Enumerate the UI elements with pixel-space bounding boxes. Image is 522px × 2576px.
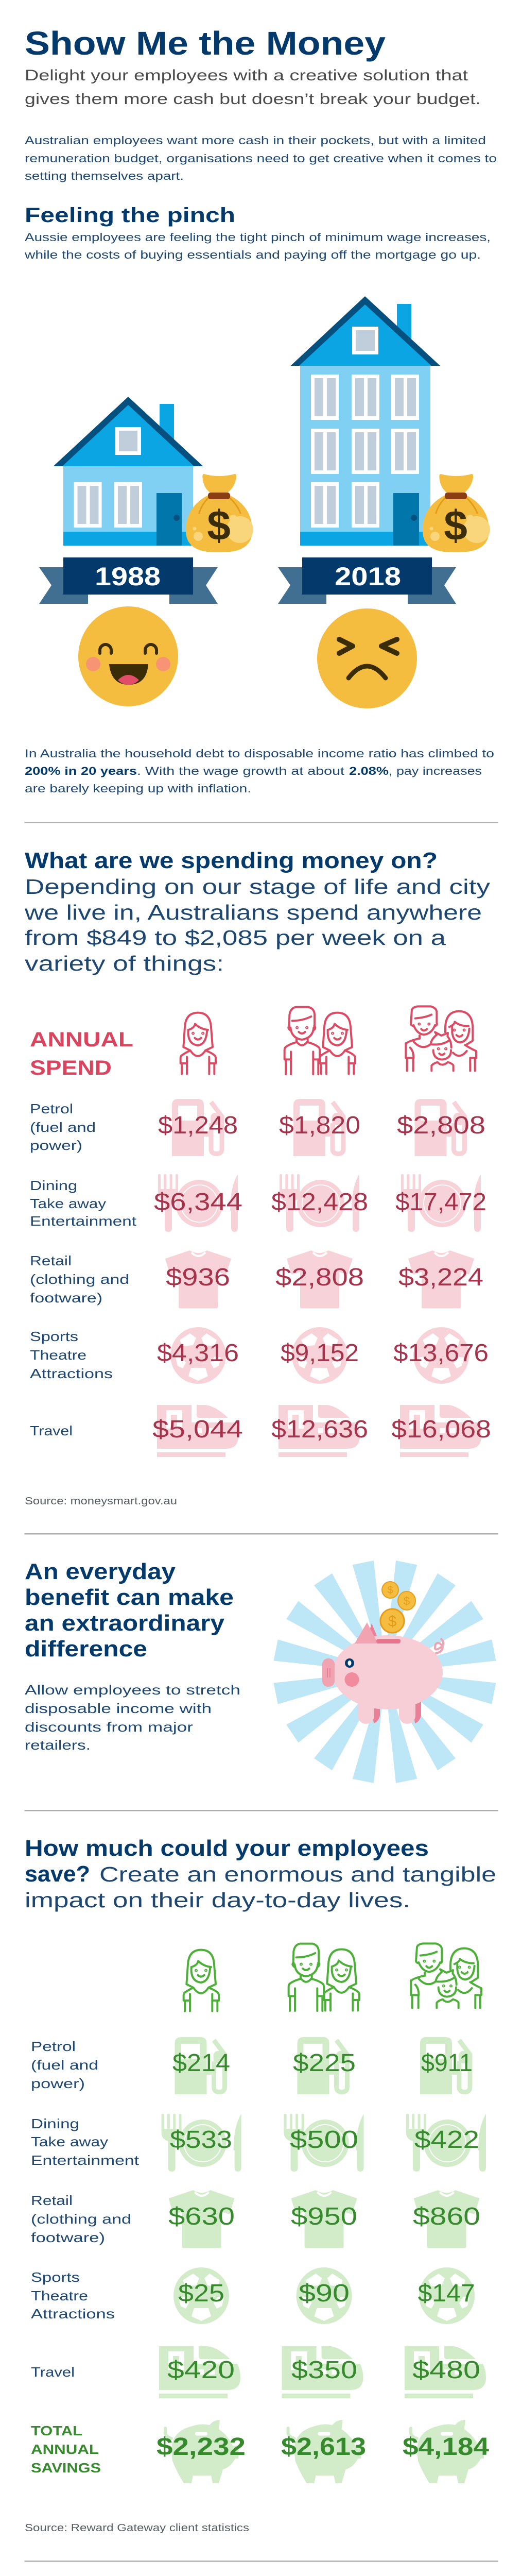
row: petrol — [31, 2037, 473, 2094]
text block: household debt: 200% in 20 years — [25, 765, 137, 777]
text block: variety of things: — [25, 952, 224, 975]
row: sports: Theatre — [31, 2288, 88, 2303]
row: dining: $17,472 — [395, 1189, 486, 1216]
heading — [25, 1836, 496, 1912]
heading: annual spend — [30, 1028, 133, 1079]
panel: everyday benefit — [25, 1559, 496, 1783]
row: total annual savings: $2,613 — [281, 2433, 366, 2461]
heading: impact on their day-to-day lives. — [25, 1888, 410, 1912]
icon: single person — [181, 1013, 216, 1074]
panel: how much could employees save — [25, 1836, 496, 2483]
icon: money bag 1988 — [186, 474, 253, 552]
row: travel: $420 — [167, 2357, 235, 2384]
row: sports: $147 — [418, 2280, 475, 2307]
icon: upset emoji — [317, 608, 417, 708]
row: sports: Theatre — [30, 1347, 86, 1363]
heading: Create an enormous and tangible — [99, 1862, 496, 1886]
text block: household debt: . With the wage growth at about — [137, 765, 345, 777]
header — [25, 25, 497, 182]
ribbon 2018: 2018 — [335, 562, 401, 591]
icon: couple — [285, 1007, 355, 1074]
heading: annual spend: ANNUAL — [30, 1028, 133, 1051]
row: petrol: $2,808 — [397, 1112, 485, 1139]
illustration: piggy bank: $ — [388, 1613, 397, 1630]
heading: an extraordinary — [25, 1611, 225, 1636]
row: sports: Attractions — [31, 2306, 115, 2321]
heading: An everyday — [25, 1559, 176, 1584]
row: dining: Dining — [30, 1178, 77, 1193]
intro paragraph — [25, 134, 497, 182]
row: petrol: $911 — [421, 2049, 473, 2077]
text block: household debt: In Australia the household debt to disposable income ratio has climbed to — [25, 747, 494, 760]
icon: family — [411, 1943, 481, 2008]
text block: household debt: , pay increases — [389, 765, 482, 777]
row: petrol: (fuel and — [30, 1120, 96, 1135]
row: petrol: $214 — [172, 2049, 230, 2077]
row: sports: Sports — [30, 1329, 78, 1344]
heading: Feeling the pinch — [25, 204, 235, 227]
row: travel: $480 — [412, 2357, 480, 2384]
row: sports: $25 — [178, 2280, 224, 2307]
text block: Depending on our stage of life and city — [25, 875, 491, 899]
icon: couple — [289, 1944, 359, 2011]
heading: difference — [25, 1636, 147, 1662]
text block: from $849 to $2,085 per week on a — [25, 926, 446, 950]
row: retail: $950 — [291, 2203, 357, 2230]
ribbon 1988 — [39, 557, 218, 604]
row: retail: $936 — [166, 1264, 230, 1291]
panel: feeling the pinch — [24, 204, 491, 261]
row: retail: footware) — [31, 2230, 105, 2245]
row: sports: Sports — [31, 2269, 80, 2285]
heading: How much could your employees — [25, 1836, 429, 1861]
row: dining: $12,428 — [271, 1189, 368, 1216]
source: moneysmart: Source: moneysmart.gov.au — [25, 1496, 177, 1507]
intro paragraph: setting themselves apart. — [25, 170, 184, 182]
row: sports: $9,152 — [281, 1340, 359, 1367]
text block: household debt: are barely keeping up with inflation. — [25, 782, 251, 795]
row: petrol: $1,248 — [158, 1112, 238, 1139]
row: travel: $12,636 — [271, 1416, 368, 1443]
row: dining — [31, 2114, 486, 2172]
row: dining: Take away — [31, 2134, 108, 2149]
heading: save? — [25, 1861, 90, 1887]
row: dining: $533 — [170, 2126, 232, 2154]
text block: we live in, Australians spend anywhere — [24, 901, 482, 924]
text block — [24, 875, 491, 975]
row: dining: $6,344 — [154, 1189, 242, 1216]
row: travel: Travel — [31, 2364, 75, 2380]
row: petrol: $225 — [293, 2049, 356, 2077]
source: reward gateway: Source: Reward Gateway client statistics — [25, 2522, 249, 2534]
icon: money bag 2018 — [423, 474, 490, 552]
row: sports: $4,316 — [157, 1340, 239, 1367]
title: Show Me the Money — [25, 25, 386, 62]
subtitle: Delight your employees with a creative solution that — [25, 67, 468, 84]
row: retail: (clothing and — [30, 1272, 129, 1287]
heading — [25, 1559, 234, 1662]
heading: benefit can make — [25, 1585, 234, 1610]
icon: single person — [184, 1950, 219, 2011]
row: dining: Entertainment — [31, 2153, 140, 2168]
row: total annual savings: SAVINGS — [31, 2460, 101, 2476]
row: total annual savings — [31, 2420, 489, 2483]
intro paragraph: Australian employees want more cash in their pockets, but with a limited — [25, 134, 486, 147]
row: sports: Attractions — [30, 1366, 113, 1381]
illustration: 2018 apartment — [290, 296, 440, 546]
row: petrol: power) — [30, 1138, 82, 1153]
text block: disposable income with — [25, 1701, 212, 1716]
row: dining: $500 — [290, 2126, 358, 2154]
row: sports: $13,676 — [393, 1340, 489, 1367]
row: retail: Retail — [30, 1253, 72, 1268]
row: dining: Dining — [31, 2116, 79, 2131]
row: travel — [31, 2346, 486, 2398]
row: sports — [30, 1327, 489, 1384]
row: travel — [30, 1405, 491, 1457]
row: total annual savings: $4,184 — [403, 2433, 489, 2461]
icon: family — [406, 1006, 476, 1071]
row: dining — [30, 1174, 486, 1232]
panel: what are we spending money on — [24, 848, 491, 975]
row: total annual savings: TOTAL — [31, 2423, 82, 2438]
illustration: 1988 house — [54, 397, 203, 546]
row: retail: $2,808 — [275, 1264, 364, 1291]
row: retail: footware) — [30, 1290, 102, 1306]
icon: happy emoji — [78, 606, 178, 706]
text block: Aussie employees are feeling the tight pinch of minimum wage increases, — [25, 231, 491, 244]
text block — [24, 231, 491, 261]
row: sports — [31, 2267, 475, 2324]
row: retail: (clothing and — [31, 2211, 131, 2227]
row: travel: Travel — [30, 1423, 73, 1438]
row: retail: $860 — [413, 2203, 480, 2230]
row: retail: $630 — [168, 2203, 235, 2230]
row: retail: $3,224 — [398, 1264, 483, 1291]
text block: retailers. — [25, 1737, 91, 1753]
text block: household debt: 2.08% — [349, 765, 389, 777]
intro paragraph: remuneration budget, organisations need to get creative when it comes to — [25, 152, 497, 165]
illustration: piggy bank — [274, 1561, 496, 1783]
row: travel: $16,068 — [391, 1416, 491, 1443]
row: total annual savings: $2,232 — [156, 2433, 246, 2461]
heading: What are we spending money on? — [25, 848, 438, 873]
row: travel: $5,044 — [152, 1416, 243, 1443]
row: petrol — [30, 1099, 485, 1156]
ribbon 1988: 1988 — [95, 562, 161, 591]
text block: discounts from major — [25, 1719, 193, 1735]
heading: annual spend: SPEND — [30, 1057, 112, 1079]
icon: money bag 2018: $ — [444, 502, 467, 549]
row: dining: Entertainment — [30, 1213, 137, 1229]
row: petrol: Petrol — [30, 1101, 73, 1116]
row: petrol: (fuel and — [31, 2057, 98, 2073]
row: petrol: $1,820 — [279, 1112, 360, 1139]
text block: while the costs of buying essentials and paying off the mortgage go up. — [24, 248, 481, 261]
ribbon 2018 — [278, 557, 456, 604]
text block: Allow employees to stretch — [25, 1682, 240, 1698]
subtitle: gives them more cash but doesn’t break your budget. — [25, 91, 481, 108]
row: petrol: Petrol — [31, 2039, 76, 2054]
row: dining: $422 — [414, 2126, 479, 2154]
icon: money bag 1988: $ — [207, 502, 231, 549]
row: retail — [31, 2190, 480, 2248]
row: retail — [30, 1250, 483, 1309]
row: retail: Retail — [31, 2193, 73, 2208]
row: sports: $90 — [299, 2280, 350, 2307]
subtitle — [25, 67, 481, 108]
row: total annual savings: ANNUAL — [31, 2442, 99, 2457]
text block — [25, 1682, 240, 1753]
row: petrol: power) — [31, 2076, 85, 2091]
row: travel: $350 — [291, 2357, 357, 2384]
text block: household debt — [25, 747, 494, 795]
panel: annual spend table — [30, 1006, 491, 1457]
illustration: piggy bank: $ — [387, 1585, 393, 1596]
row: dining: Take away — [30, 1196, 106, 1211]
illustration: piggy bank: $ — [404, 1595, 410, 1607]
